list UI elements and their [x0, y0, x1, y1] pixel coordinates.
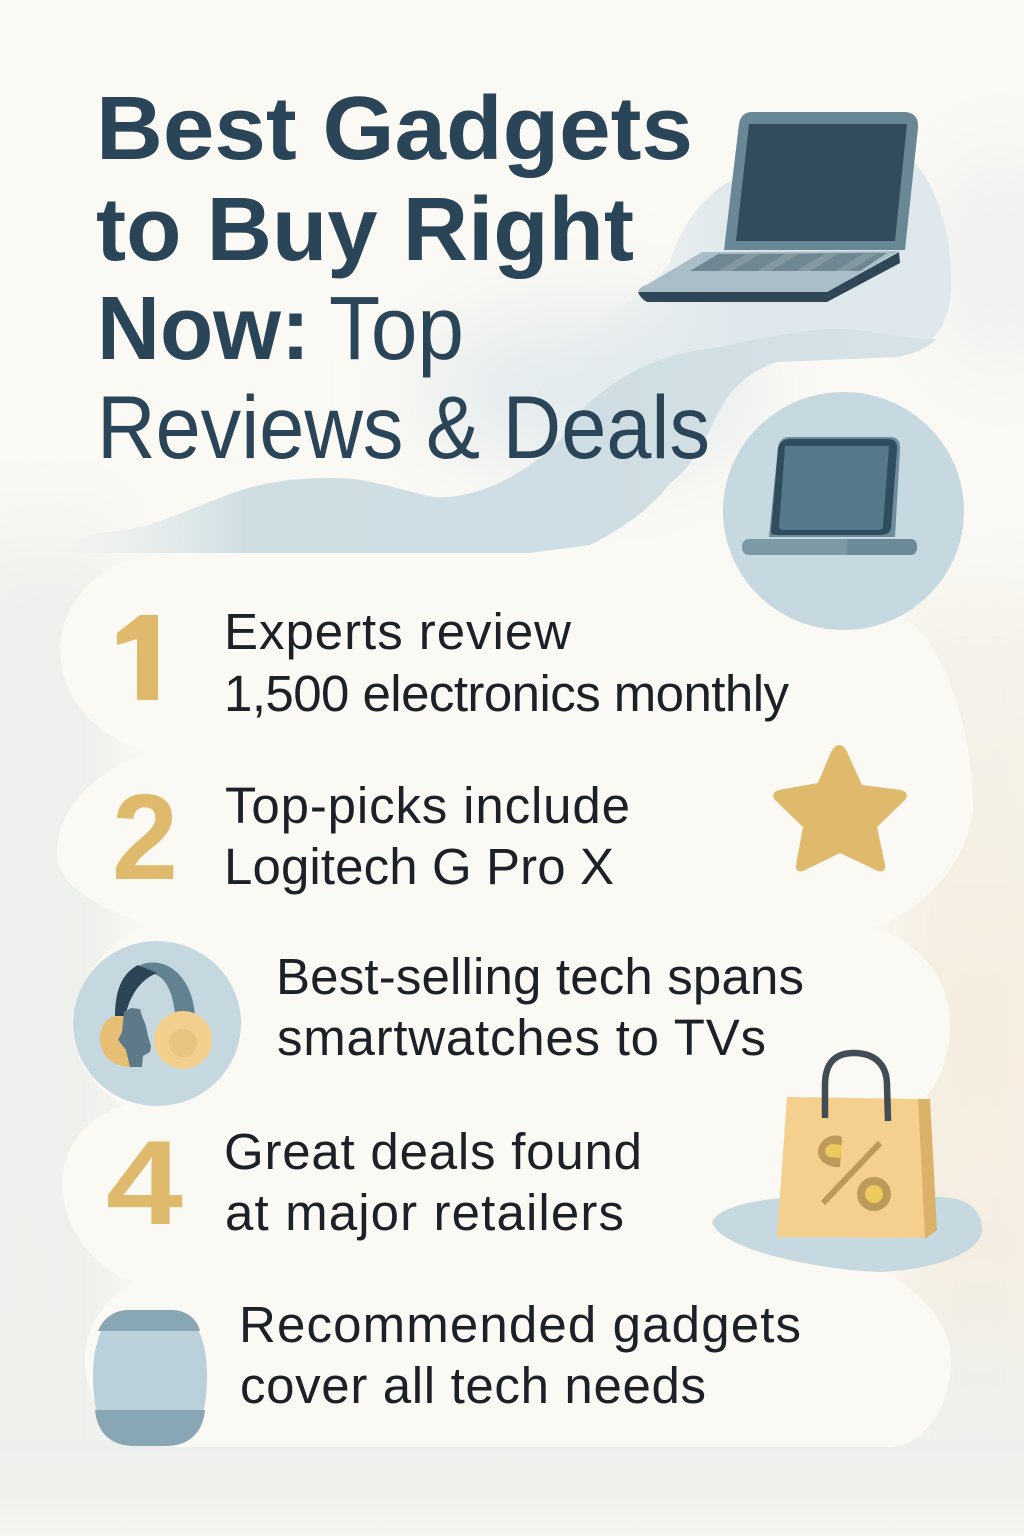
row 5 text: Recommended gadgets	[239, 1296, 801, 1353]
title: to Buy Right	[96, 180, 634, 280]
number 4: 4	[106, 1116, 183, 1250]
icon: smart speaker	[93, 1310, 207, 1446]
icon: shopping bag on blue shadow	[712, 1053, 982, 1272]
icon: star	[773, 745, 907, 871]
darker wave band	[60, 329, 937, 553]
icon: small laptop in circle	[723, 392, 964, 630]
row 4: at major retailers	[225, 1184, 624, 1241]
number 1	[117, 615, 158, 700]
row 3 text	[276, 948, 804, 1066]
row 4: Great deals found	[224, 1123, 642, 1180]
title: Now:	[97, 279, 310, 379]
pale wash behind laptop	[560, 151, 951, 483]
row 3 text: smartwatches to TVs	[277, 1009, 766, 1066]
row 3 text: Best-selling tech spans	[276, 948, 804, 1005]
row 2: Top-picks include	[225, 777, 630, 834]
row 1: 1,500 electronics monthly	[224, 665, 790, 722]
number 2: 2	[112, 769, 178, 905]
row 5 text: cover all tech needs	[240, 1357, 706, 1414]
title: Reviews & Deals	[97, 377, 710, 477]
row backdrop shape	[57, 553, 973, 1447]
title: Top	[329, 279, 464, 379]
row 2: Logitech G Pro X	[224, 838, 614, 895]
row 2	[112, 769, 630, 905]
title: Best Gadgets	[96, 79, 693, 179]
row 5 text	[239, 1296, 801, 1414]
row 1: Experts review	[224, 603, 571, 660]
icon: headphones in circle	[73, 941, 241, 1106]
row 1	[117, 603, 790, 722]
title	[96, 79, 710, 477]
row 4	[106, 1116, 642, 1250]
icon: large laptop	[638, 112, 918, 302]
